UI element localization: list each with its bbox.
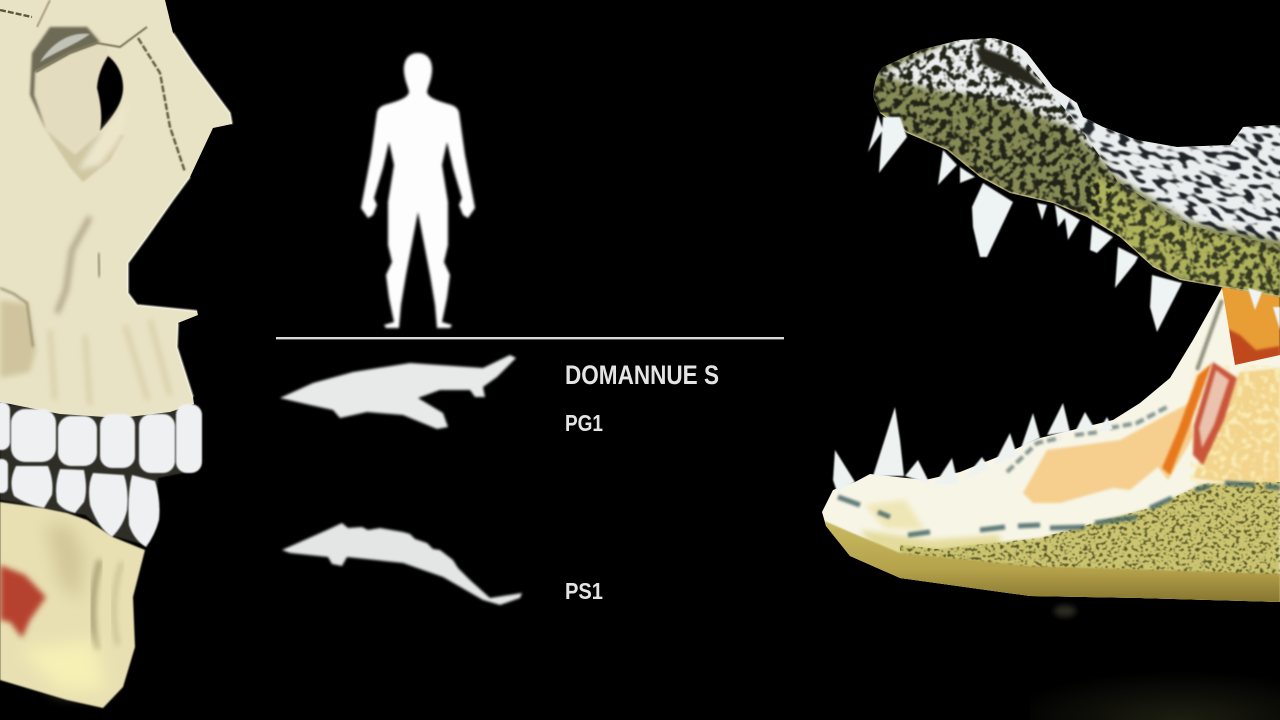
tooth gap backing — [0, 405, 198, 545]
crocodile upper mouth interior — [1216, 285, 1280, 375]
icon: crocodile skull silhouette upper — [280, 355, 516, 429]
floor shadow under crocodile — [1030, 650, 1280, 720]
crocodile lower jaw — [820, 280, 1280, 610]
crocodile upper jaw — [873, 38, 1280, 297]
crocodile lower teeth — [833, 403, 1113, 492]
jaw shadow spot — [1054, 605, 1076, 617]
eye socket — [30, 25, 147, 182]
upper teeth — [0, 402, 202, 473]
label: upper value: PG1 — [565, 410, 603, 436]
lower teeth — [0, 459, 160, 547]
jaw muscle — [0, 565, 46, 638]
label: heading: DOMANNUE S — [565, 360, 719, 390]
crocodile illustration — [820, 18, 1280, 617]
skull illustration — [0, 0, 240, 708]
icon: crocodile skull silhouette lower — [282, 523, 522, 605]
crocodile upper teeth — [868, 115, 1280, 332]
face edge highlight — [128, 33, 232, 397]
skull upper cranium — [0, 0, 240, 420]
lower jaw bone — [0, 502, 145, 708]
baseline divider — [276, 337, 784, 339]
label: lower value: PS1 — [565, 578, 603, 604]
icon: human silhouette — [361, 53, 475, 328]
